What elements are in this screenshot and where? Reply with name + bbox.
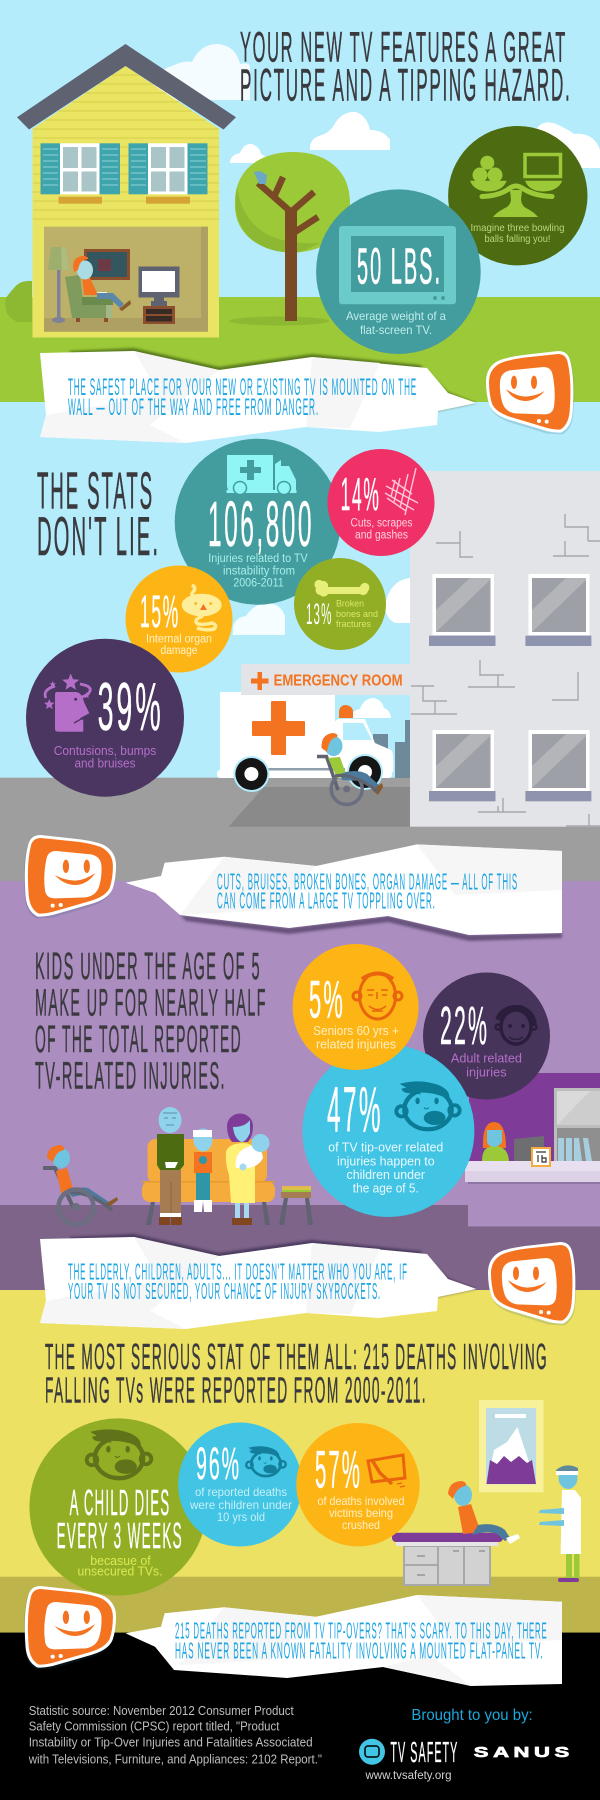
circle: 5% seniors: 5% xyxy=(309,970,345,1029)
speech bubble 1 xyxy=(40,348,476,443)
waiting room family xyxy=(43,1107,313,1225)
circle: 39%: 39% xyxy=(98,669,164,745)
reception desk area xyxy=(465,1073,600,1226)
circle: 39%: and bruises xyxy=(74,756,136,770)
circle: 57%: victims being xyxy=(329,1506,393,1520)
icon: ambulance xyxy=(226,455,296,494)
text: A CHILD DIES xyxy=(70,1482,170,1523)
circle: bowling balls: balls falling you! xyxy=(484,233,550,245)
circle: 57%: of deaths involved xyxy=(318,1494,404,1508)
source note: Instability or Tip-Over Injuries and Fatalities Associated xyxy=(29,1736,313,1750)
circle: 50 lbs: 50 LBS. xyxy=(357,237,442,294)
background: purple floor xyxy=(0,1205,600,1290)
filing cabinet xyxy=(554,1088,600,1161)
speech bubble 3 xyxy=(40,1234,476,1329)
tree xyxy=(229,152,350,326)
background: sky xyxy=(0,0,600,800)
circle: 50 lbs xyxy=(316,189,481,354)
background: yellow wall xyxy=(0,1290,600,1577)
text: DON'T LIE. xyxy=(37,505,160,567)
circle: 96% xyxy=(178,1422,302,1546)
injured boy xyxy=(193,1128,212,1212)
desk sign xyxy=(531,1147,551,1167)
circle: 22% adults xyxy=(423,972,550,1100)
person in wheelchair xyxy=(43,1145,118,1224)
circle: 13%: 13% xyxy=(306,598,332,631)
circle: 13%: Broken xyxy=(336,598,364,608)
circle: bowling balls xyxy=(448,126,588,265)
circle: 106,800: instability from xyxy=(223,566,295,578)
icon: child face xyxy=(396,1081,460,1129)
circle: 50 lbs: flat-screen TV. xyxy=(360,323,432,337)
circle: 14%: Cuts, scrapes xyxy=(350,518,413,530)
cloud behind title xyxy=(156,44,250,100)
website: www.tvsafety.org xyxy=(365,1770,452,1782)
circle: 96%: of reported deaths xyxy=(195,1485,287,1499)
circle: a child dies: unsecured TVs. xyxy=(78,1564,162,1578)
icon: senior face xyxy=(353,973,402,1019)
background: yellow floor xyxy=(0,1577,600,1633)
brought to you by: Brought to you by: xyxy=(411,1707,533,1724)
circle: 106,800: 2006-2011 xyxy=(233,578,284,590)
circle: 13%: bones and xyxy=(336,609,378,619)
circle: 5% seniors: related injuries xyxy=(316,1038,396,1052)
icon: broken TV xyxy=(368,1455,405,1487)
circle: 14%: and gashes xyxy=(355,530,408,542)
circle: 57%: 57% xyxy=(315,1440,362,1499)
circle: 13% xyxy=(294,558,386,650)
text: TV SAFETY xyxy=(390,1737,458,1769)
receptionist xyxy=(482,1122,509,1161)
cloud centre xyxy=(310,112,390,150)
armchair and person xyxy=(65,256,131,322)
circle: 39%: Contusions, bumps xyxy=(54,744,156,758)
circle: 57% xyxy=(296,1423,420,1546)
source note: with Televisions, Furniture, and Appliances: 2102 Report." xyxy=(28,1752,322,1766)
circle: 96%: 10 yrs old xyxy=(217,1510,265,1524)
logo: Sanus: SANUS xyxy=(474,1745,574,1761)
couch xyxy=(142,1139,275,1225)
background: black footer xyxy=(0,1633,600,1800)
icon: balance scale xyxy=(470,154,562,217)
circle: 5% seniors xyxy=(293,944,419,1070)
circle: 15%: Internal organ xyxy=(146,634,212,646)
icon: bird xyxy=(254,171,267,184)
circle: 47% children: injuries happen to xyxy=(337,1154,435,1168)
road shadow xyxy=(228,787,410,827)
background: road xyxy=(0,778,600,882)
monitor xyxy=(514,1136,544,1161)
circle: 15%: damage xyxy=(160,645,198,657)
circle: 57%: crushed xyxy=(342,1518,380,1532)
icon: smiling TV mascot left xyxy=(24,835,116,918)
cloud on window xyxy=(352,698,391,718)
heading: the stats xyxy=(37,462,160,567)
house wall xyxy=(32,66,219,338)
circle: 96%: 96% xyxy=(196,1438,241,1489)
icon: broken bone xyxy=(314,580,369,597)
ambulance xyxy=(217,692,393,792)
icon: smiling TV mascot xyxy=(486,351,574,434)
text: OF THE TOTAL REPORTED xyxy=(35,1019,242,1061)
circle: 15%: 15% xyxy=(140,586,180,637)
background: purple wall xyxy=(0,881,600,1205)
window left xyxy=(40,143,120,204)
boy on table xyxy=(448,1481,520,1544)
person in wheelchair xyxy=(317,733,383,804)
cloud behind stats left xyxy=(233,603,285,635)
text: TV-RELATED INJURIES. xyxy=(35,1056,226,1098)
icon: head with stars xyxy=(44,674,90,732)
circle: 15% xyxy=(126,566,232,672)
circle: 13%: fractures xyxy=(336,619,371,629)
emergency room sign xyxy=(241,664,410,695)
circle: 96%: were children under xyxy=(189,1498,292,1512)
circle: 47% children: the age of 5. xyxy=(353,1182,419,1196)
circle: 47% children: of TV tip-over related xyxy=(328,1140,443,1154)
source note: Statistic source: November 2012 Consumer Product xyxy=(29,1704,294,1718)
emergency room sign: EMERGENCY ROOM xyxy=(274,672,403,690)
living room xyxy=(44,227,208,332)
icon: scratches xyxy=(385,468,418,515)
circle: bowling balls: Imagine three bowling xyxy=(470,222,565,234)
icon: child face xyxy=(87,1429,151,1478)
icon: adult face xyxy=(496,1008,536,1044)
house roof xyxy=(17,44,236,130)
cloud right xyxy=(534,122,600,168)
speech bubble 4 xyxy=(126,1595,562,1686)
circle: 14% xyxy=(328,449,434,556)
cloud behind stats right xyxy=(385,578,410,623)
side table with books xyxy=(279,1186,313,1225)
circle: 22% adults: injuries xyxy=(466,1066,507,1080)
counter xyxy=(465,1161,600,1184)
building xyxy=(410,471,600,827)
circle: 106,800 xyxy=(175,439,341,605)
television in room xyxy=(138,266,180,324)
logo: TV Safety xyxy=(359,1737,458,1769)
window right xyxy=(128,143,208,204)
circle: a child dies xyxy=(29,1418,207,1596)
building windows xyxy=(429,574,591,801)
bush xyxy=(5,281,32,322)
wall picture xyxy=(84,249,130,280)
grandfather xyxy=(157,1107,184,1225)
circle: 22% adults: Adult related xyxy=(451,1052,522,1066)
icon: flat-screen TV xyxy=(339,226,456,304)
circle: 22% adults: 22% xyxy=(440,996,489,1056)
source note xyxy=(28,1704,322,1766)
text: 106,800 xyxy=(208,488,314,560)
circle: 47% children: 47% xyxy=(327,1074,383,1146)
text: EVERY 3 WEEKS xyxy=(57,1515,183,1556)
icon: smiling TV mascot left bottom xyxy=(24,1586,116,1669)
circle: 50 lbs: Average weight of a xyxy=(346,309,446,323)
circle: 47% children xyxy=(302,1045,474,1217)
heading: most serious stat xyxy=(45,1336,548,1411)
house xyxy=(17,44,236,338)
exam table xyxy=(392,1533,503,1585)
speech bubble 2 xyxy=(126,844,562,941)
heading: kids under 5 xyxy=(35,946,267,1098)
background: grass xyxy=(0,297,600,402)
circle: 14%: 14% xyxy=(341,468,381,520)
doctor xyxy=(539,1465,581,1582)
icon: child face xyxy=(246,1446,286,1476)
icon: internal organ xyxy=(182,585,222,630)
circle: 106,800: Injuries related to TV xyxy=(208,553,308,565)
wall picture mountain xyxy=(479,1400,544,1492)
text: THE STATS xyxy=(37,462,154,520)
distant building steps xyxy=(373,720,410,778)
circle: 47% children: children under xyxy=(347,1168,425,1182)
mother and baby xyxy=(226,1113,270,1225)
circle: 39% xyxy=(26,639,184,797)
circle: a child dies: becasue of xyxy=(90,1553,151,1568)
cloud small xyxy=(230,144,268,163)
floor lamp xyxy=(48,247,69,323)
title xyxy=(240,24,572,111)
circle: 5% seniors: Seniors 60 yrs + xyxy=(313,1024,399,1038)
icon: smiling TV mascot right xyxy=(488,1242,576,1325)
source note: Safety Commission (CPSC) report titled, "Product xyxy=(29,1720,280,1734)
